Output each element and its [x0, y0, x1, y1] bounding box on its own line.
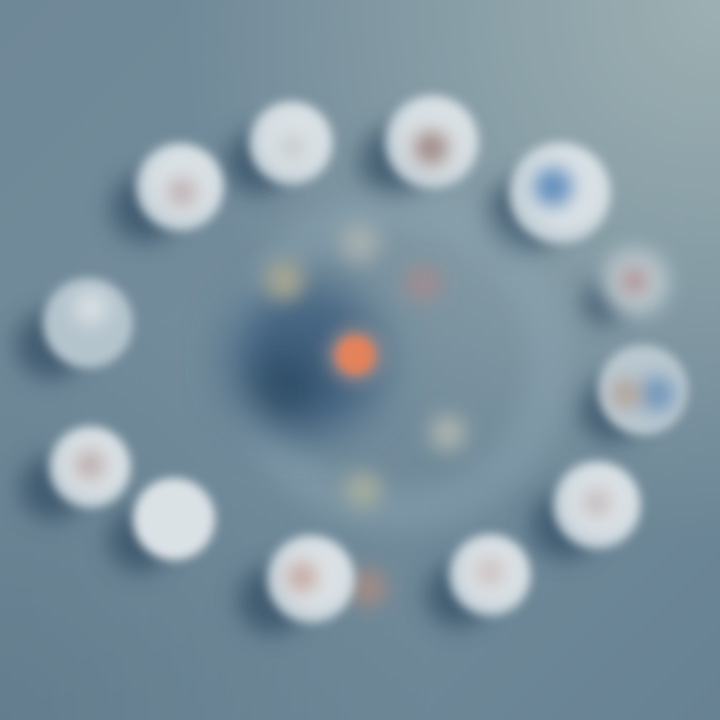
disc: lower right [553, 461, 641, 549]
central dark hub [227, 282, 383, 438]
disc: bottom right [449, 534, 531, 616]
disc: top centre [385, 95, 479, 189]
small inner nodes [264, 223, 466, 607]
inner ring glow [250, 210, 550, 510]
disc: blue icon [509, 142, 611, 244]
icon: central orange node [325, 325, 385, 385]
disc: left [43, 278, 133, 368]
disc: left lower [49, 426, 131, 508]
disc: lower left [133, 478, 215, 560]
disc: top left [136, 143, 224, 231]
disc: bottom centre [267, 535, 355, 623]
disc: right [598, 345, 688, 435]
disc: small right [602, 249, 668, 315]
disc: top centre left [249, 101, 333, 185]
disc shadows [16, 126, 644, 634]
